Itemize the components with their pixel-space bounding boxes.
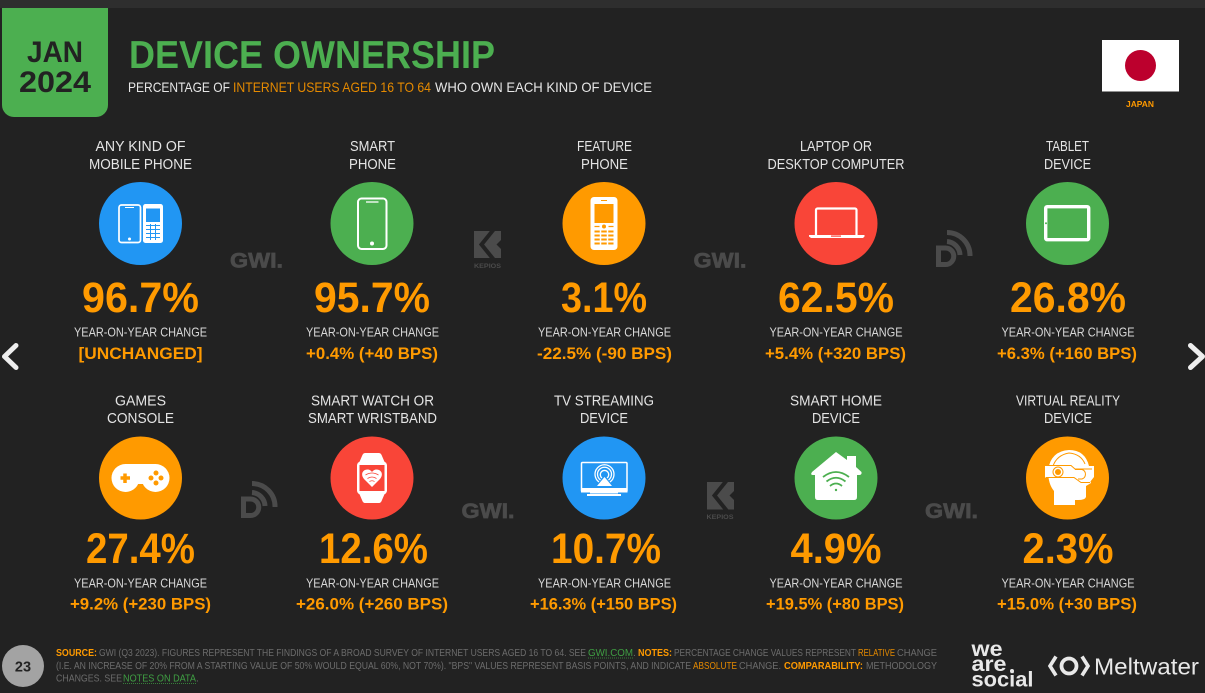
panel: tablet device: TABLET	[1046, 138, 1089, 155]
logo: Meltwater	[1050, 654, 1199, 680]
panel: games console: YEAR-ON-YEAR CHANGE	[74, 576, 207, 590]
panel: smart home device	[766, 392, 904, 614]
panel: virtual reality device: DEVICE	[1044, 410, 1092, 427]
panel: laptop or desktop computer	[765, 138, 906, 363]
panel: virtual reality device: +15.0% (+30 BPS)	[997, 594, 1137, 614]
footnote: GWI (Q3 2023). FIGURES REPRESENT THE FINDINGS OF A BROAD SURVEY OF INTERNET USERS AGED 16 TO 64. SEE	[99, 648, 586, 659]
panel: tv streaming device: 10.7%	[551, 525, 661, 573]
subtitle	[128, 79, 652, 95]
panel: smart home device: +19.5% (+80 BPS)	[766, 594, 904, 614]
panel: laptop or desktop computer: 62.5%	[778, 274, 894, 322]
panel: tablet device: DEVICE	[1044, 156, 1091, 173]
panel: tv streaming device: +16.3% (+150 BPS)	[530, 594, 677, 614]
panel: smart phone: YEAR-ON-YEAR CHANGE	[306, 326, 439, 340]
panel: laptop or desktop computer: DESKTOP COMPUTER	[768, 156, 905, 173]
panel: any kind of mobile phone: YEAR-ON-YEAR CHANGE	[74, 326, 207, 340]
footnote: GWI.COM	[588, 648, 633, 659]
panel: any kind of mobile phone: MOBILE PHONE	[89, 156, 192, 173]
panel: laptop or desktop computer: LAPTOP OR	[800, 138, 872, 155]
arrow: previous	[4, 346, 16, 368]
source logo: DataReportal bottom left	[244, 484, 275, 516]
panel: virtual reality device: YEAR-ON-YEAR CHANGE	[1002, 576, 1134, 590]
page number	[2, 645, 44, 687]
panel: virtual reality device	[997, 392, 1137, 614]
panel: smart watch or smart wristband: SMART WRISTBAND	[308, 410, 437, 427]
panel: feature phone: -22.5% (-90 BPS)	[537, 344, 672, 363]
panel: virtual reality device: 2.3%	[1022, 525, 1114, 573]
panel: any kind of mobile phone	[74, 138, 207, 363]
panel: feature phone	[537, 138, 672, 363]
icon: mobile phones	[99, 182, 182, 265]
footnote: ABSOLUTE	[693, 661, 737, 672]
icon: smartphone	[330, 182, 414, 265]
logo: We Are Social: are	[972, 653, 1006, 676]
footnote: CHANGE.	[739, 661, 781, 672]
logo: We Are Social	[970, 638, 1034, 692]
footnote: METHODOLOGY	[866, 661, 937, 672]
icon: tv streaming	[562, 436, 646, 520]
footnote: PERCENTAGE CHANGE VALUES REPRESENT	[674, 648, 856, 659]
panel: games console: CONSOLE	[107, 410, 174, 427]
source logo: Kepios top: KEPIOS	[474, 263, 502, 270]
date tab: 2024	[19, 66, 91, 99]
footnote: COMPARABILITY:	[784, 661, 863, 672]
panel: feature phone: 3.1%	[561, 274, 647, 322]
panel: tablet device: +6.3% (+160 BPS)	[997, 344, 1137, 363]
panel: smart watch or smart wristband: YEAR-ON-YEAR CHANGE	[306, 576, 439, 590]
panel: smart watch or smart wristband: 12.6%	[319, 525, 428, 573]
panel: laptop or desktop computer: +5.4% (+320 BPS)	[765, 344, 906, 363]
flag: Japan: JAPAN	[1126, 99, 1154, 109]
page number: 23	[15, 660, 31, 676]
icon: smart home	[794, 436, 878, 520]
footnote: (I.E. AN INCREASE OF 20% FROM A STARTING VALUE OF 50% WOULD EQUAL 60%, NOT 70%). "BPS" VALUES REPRESENT BASIS POINTS, AND INDICATE	[56, 661, 691, 672]
icon: tablet	[1026, 182, 1109, 265]
source logo: GWI bottom left centre: GWI.	[462, 500, 514, 523]
panel: feature phone: YEAR-ON-YEAR CHANGE	[538, 326, 671, 340]
panel: tv streaming device: YEAR-ON-YEAR CHANGE	[538, 576, 671, 590]
source logo: GWI top centre: GWI.	[694, 250, 746, 272]
source logo: DataReportal top right	[938, 232, 970, 264]
panel: games console: GAMES	[115, 392, 166, 410]
panel: tablet device: YEAR-ON-YEAR CHANGE	[1002, 326, 1134, 340]
arrow: next	[1190, 346, 1202, 368]
footnote: CHANGES. SEE	[56, 674, 122, 684]
panel: games console: +9.2% (+230 BPS)	[70, 594, 211, 614]
panel: games console: 27.4%	[86, 525, 195, 573]
subtitle: PERCENTAGE OF	[128, 79, 230, 95]
panel: smart home device: SMART HOME	[790, 392, 882, 410]
title: DEVICE OWNERSHIP	[129, 34, 495, 77]
panel: smart home device: YEAR-ON-YEAR CHANGE	[770, 576, 902, 590]
source logo: Kepios top	[474, 229, 502, 270]
footnote: RELATIVE	[858, 648, 895, 659]
icon: game controller	[99, 436, 182, 520]
logo: We Are Social: we	[970, 638, 1002, 661]
panel: any kind of mobile phone: [UNCHANGED]	[78, 344, 202, 363]
footnote: .	[196, 674, 199, 684]
date tab: JAN	[27, 36, 83, 69]
footnote	[56, 648, 937, 684]
subtitle: WHO OWN EACH KIND OF DEVICE	[435, 79, 652, 95]
footnote: NOTES ON DATA	[123, 674, 196, 684]
footnote: SOURCE:	[56, 648, 97, 659]
source logo: GWI top left: GWI.	[230, 250, 283, 272]
panel: tv streaming device: DEVICE	[580, 410, 628, 427]
flag: Japan	[1102, 40, 1179, 109]
panel: tv streaming device: TV STREAMING	[554, 392, 654, 410]
icon: feature phone	[562, 182, 646, 265]
logo: Meltwater: Meltwater	[1094, 654, 1199, 680]
source logo: Kepios bottom	[706, 480, 735, 521]
panel: smart phone	[306, 138, 439, 363]
panel: tablet device	[997, 138, 1137, 363]
panel: any kind of mobile phone: ANY KIND OF	[96, 138, 186, 155]
footnote: NOTES:	[638, 648, 672, 659]
panel: feature phone: FEATURE	[577, 138, 632, 155]
footnote: .	[633, 648, 636, 659]
panel: laptop or desktop computer: YEAR-ON-YEAR CHANGE	[770, 326, 902, 340]
panel: smart watch or smart wristband: SMART WATCH OR	[311, 392, 434, 410]
panel: any kind of mobile phone: 96.7%	[82, 274, 199, 322]
panel: smart watch or smart wristband	[296, 392, 448, 614]
panel: smart phone: 95.7%	[314, 274, 430, 322]
footnote: CHANGE	[897, 648, 937, 659]
source logo: GWI bottom right: GWI.	[925, 500, 978, 523]
panel: smart phone: +0.4% (+40 BPS)	[306, 344, 438, 363]
panel: smart phone: SMART	[350, 138, 395, 155]
icon: smart watch	[330, 436, 414, 520]
panel: smart phone: PHONE	[349, 156, 396, 173]
panel: smart watch or smart wristband: +26.0% (+260 BPS)	[296, 594, 448, 614]
panel: tv streaming device	[530, 392, 677, 614]
logo: We Are Social: social	[972, 668, 1034, 692]
date tab	[2, 8, 108, 117]
icon: laptop	[794, 182, 878, 265]
panel: smart home device: DEVICE	[812, 410, 860, 427]
panel: feature phone: PHONE	[581, 156, 628, 173]
source logo: Kepios bottom: KEPIOS	[706, 514, 734, 521]
icon: virtual reality headset	[1026, 436, 1109, 520]
subtitle: INTERNET USERS AGED 16 TO 64	[233, 79, 431, 95]
panel: games console	[70, 392, 211, 614]
panel: smart home device: 4.9%	[790, 525, 882, 573]
panel: tablet device: 26.8%	[1010, 274, 1126, 322]
panel: virtual reality device: VIRTUAL REALITY	[1016, 392, 1120, 410]
